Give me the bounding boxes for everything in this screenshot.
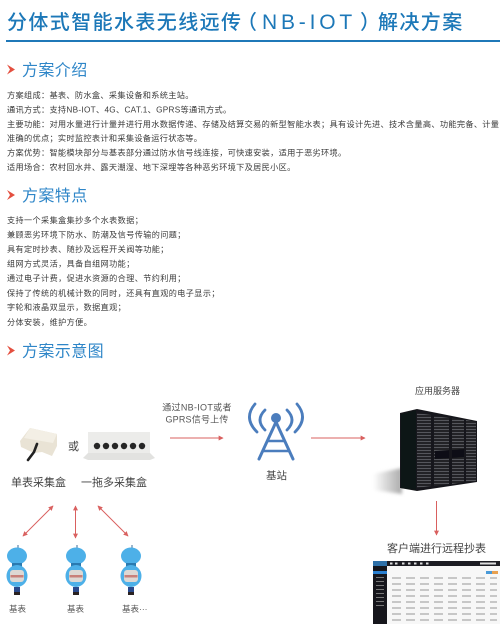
text block: introduction: 准确的优点；实时监控表计和采集设备运行状态等。 bbox=[7, 133, 202, 143]
label: transmission: 通过NB-IOT或者 bbox=[162, 402, 232, 412]
arrow: base station to server bbox=[311, 437, 365, 439]
text block: features: 保持了传统的机械计数的同时，还具有直观的电子显示； bbox=[7, 288, 220, 298]
screenshot: client software bbox=[373, 561, 500, 624]
text block: introduction: 方案优势：智能模块部分与基表部分通过防水信号线连接，可快速安装，适用于恶劣环境。 bbox=[7, 148, 347, 158]
label: transmission bbox=[162, 402, 232, 424]
icon: water meter 3 bbox=[120, 545, 142, 595]
title: （ bbox=[237, 11, 258, 34]
label: 基站: 基站 bbox=[266, 469, 287, 482]
label: 单表采集盒: 单表采集盒 bbox=[11, 475, 66, 489]
icon: water meter 1 bbox=[6, 545, 28, 595]
text block: introduction: 方案组成：基表、防水盒、采集设备和系统主站。 bbox=[7, 90, 194, 100]
label: 应用服务器: 应用服务器 bbox=[415, 385, 460, 396]
section: 方案特点 bbox=[7, 187, 88, 205]
text block: introduction bbox=[7, 90, 499, 172]
title: ） bbox=[360, 11, 381, 34]
heading: 方案特点: 方案特点 bbox=[22, 187, 88, 205]
text block: features: 字轮和液晶双显示，数据直观； bbox=[7, 302, 126, 312]
icon: water meter 2 bbox=[66, 545, 86, 595]
text block: introduction: 适用场合：农村回水井、露天潮湿、地下深埋等各种恶劣环境下及居民小区。 bbox=[7, 162, 296, 172]
label: 基表 3: 基表··· bbox=[122, 604, 148, 614]
arrow: collector to base station bbox=[170, 437, 223, 439]
label: 基表 1: 基表 bbox=[9, 604, 27, 614]
arrow: server to client bbox=[436, 501, 438, 535]
label: 客户端进行远程抄表: 客户端进行远程抄表 bbox=[387, 541, 486, 555]
icon: chevron bbox=[7, 190, 15, 200]
arrow: collector to meter 1 bbox=[23, 506, 53, 536]
text block: features: 组网方式灵活，具备自组网功能； bbox=[7, 258, 135, 268]
heading: 方案示意图: 方案示意图 bbox=[22, 342, 104, 360]
label: transmission: GPRS信号上传 bbox=[165, 414, 229, 424]
arrow: collector to meter 2 bbox=[74, 506, 76, 538]
icon: chevron bbox=[7, 64, 15, 74]
title bbox=[7, 11, 464, 34]
text block: features: 分体安装，维护方便。 bbox=[7, 317, 92, 327]
title: 解决方案 bbox=[378, 11, 464, 34]
section: 方案介绍 bbox=[7, 62, 88, 80]
text block: features: 通过电子计费，促进水资源的合理、节约利用； bbox=[7, 273, 186, 283]
text block: features bbox=[7, 215, 220, 327]
text block: features: 支持一个采集盒集抄多个水表数据； bbox=[7, 215, 143, 225]
label: 或: 或 bbox=[68, 440, 79, 453]
text block: introduction: 主要功能：对用水量进行计量并进行用水数据传递、存储及结算交易的新型智能水表；具有设计先进、技术含量高、功能完备、计量 bbox=[7, 119, 499, 129]
section: 方案示意图 bbox=[7, 342, 104, 360]
text block: features: 兼顾恶劣环境下防水、防潮及信号传输的问题； bbox=[7, 230, 186, 240]
label: 基表 2: 基表 bbox=[67, 604, 85, 614]
title: 分体式智能水表无线远传 bbox=[7, 11, 242, 34]
icon: multi-meter collector box bbox=[83, 432, 155, 460]
text block: introduction: 通讯方式：支持NB-IOT、4G、CAT.1、GPRS等通讯方式。 bbox=[7, 104, 231, 114]
heading: 方案介绍: 方案介绍 bbox=[22, 62, 88, 80]
icon: server racks bbox=[373, 409, 477, 494]
title rule bbox=[6, 40, 500, 42]
icon: base station tower bbox=[249, 404, 303, 459]
arrow: collector to meter 3 bbox=[98, 506, 128, 536]
title: NB-IOT bbox=[262, 11, 356, 34]
icon: chevron bbox=[7, 346, 15, 356]
label: 一拖多采集盒: 一拖多采集盒 bbox=[81, 475, 147, 489]
icon: single-meter collector box bbox=[20, 428, 57, 460]
text block: features: 具有定时抄表、随抄及远程开关阀等功能； bbox=[7, 244, 169, 254]
